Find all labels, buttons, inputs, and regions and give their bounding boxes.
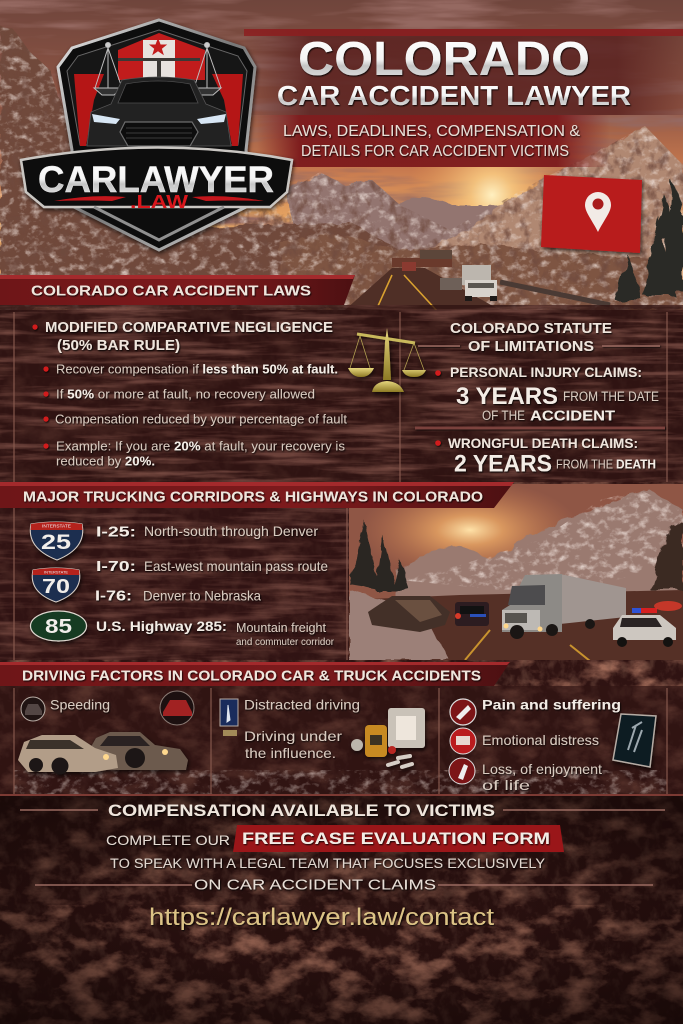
icon: pain [450,699,476,725]
section heading: laws [0,275,355,305]
icon: interstate 25 shield: 25 [41,531,71,554]
text block: statute of limitations: OF THE [482,408,525,423]
icon: route 85 oval [30,611,86,641]
illustration: breathalyzer and pills [351,708,425,767]
hero mountain scenery [0,0,683,312]
icon: interstate 70 shield: 70 [42,576,70,598]
footer: compensation call to action: TO SPEAK WITH A LEGAL TEAM THAT FOCUSES EXCLUSIVELY [110,856,545,871]
pines [350,520,410,590]
icon: loss of enjoyment [449,758,475,784]
icon: gold scales of justice [348,328,426,392]
section heading: driving factors [0,662,510,686]
cell: distracted and impaired driving [220,696,425,767]
illustration: two collided cars [18,732,188,774]
cell: speeding [18,691,194,774]
cell: distracted and impaired driving: Distracted driving [244,696,360,712]
text block: modified comparative negligence: Compensation reduced by your percentage of fault [55,412,347,426]
icon: distress [450,728,476,754]
police car [613,601,682,647]
text block: highway list: Mountain freight [236,620,326,635]
text block: statute of limitations: FROM THE [556,458,613,472]
text block: statute of limitations [415,321,665,478]
text block: statute of limitations: 3 YEARS [456,383,558,410]
red side panels [74,74,243,146]
heading: COMPENSATION AVAILABLE TO VICTIMS [108,802,495,820]
road ground [349,590,683,660]
hero truck [440,265,497,301]
flag [118,33,205,80]
text block: modified comparative negligence: Example: If you are 20% at fault, your recovery is [56,438,345,454]
text block: highway list: and commuter corridor [236,637,335,648]
panel: laws and statute background [0,305,683,482]
right mountain [433,126,683,259]
cell: distracted and impaired driving: Driving under [244,728,342,744]
cell: pain and suffering [449,698,656,793]
illustration: framed document in snow [613,714,656,767]
banner swooshes [54,196,264,201]
text block: modified comparative negligence: (50% BAR RULE) [57,338,180,354]
scales [94,42,221,95]
distant town and vehicles [392,250,452,271]
sun glow [418,167,560,206]
text block: modified comparative negligence [32,320,347,468]
subtitle: LAWS, DEADLINES, COMPENSATION & [283,123,580,140]
text block: statute of limitations: COLORADO STATUTE [450,321,612,337]
red callout box: FREE CASE EVALUATION FORM [242,829,550,848]
far mountain range [286,174,499,251]
icon: interstate 70 shield [32,568,80,602]
shield outer [58,20,255,250]
right pine trees [615,180,683,300]
text block: modified comparative negligence: reduced by 20%. [56,454,155,468]
mid foreground valley [280,234,683,310]
text block: statute of limitations: ACCIDENT [530,408,615,424]
logo: CarLawyer.law shield [21,20,292,250]
wreck [368,596,450,632]
text block: highway list: I-25: [96,524,136,540]
panel: highways background [0,508,350,660]
car [87,77,231,146]
cell: pain and suffering: Pain and suffering [482,698,621,712]
section heading: driving factors: DRIVING FACTORS IN COLORADO CAR & TRUCK ACCIDENTS [22,668,481,684]
cell: pain and suffering: Loss, of enjoyment [482,761,602,777]
icon: speeding gauge [21,697,45,721]
text block: highway list: North-south through Denver [144,523,318,539]
snow on slopes [0,0,683,310]
cell: pain and suffering: of life [482,777,530,793]
panel: driving factors background [0,686,683,796]
text block: statute of limitations: OF LIMITATIONS [468,339,594,355]
semi truck [502,574,626,639]
title [277,33,631,111]
footer: compensation call to action: COMPLETE OUR [106,832,230,848]
subtitle [283,123,580,160]
road [345,268,500,310]
section heading: laws: COLORADO CAR ACCIDENT LAWS [31,282,311,300]
text block: statute of limitations: PERSONAL INJURY CLAIMS: [450,364,642,380]
section heading: highways: MAJOR TRUCKING CORRIDORS & HIGHWAYS IN COLORADO [23,488,483,506]
lower chevron [94,207,224,240]
title band [244,29,683,167]
illustration: truck crash scene in mountains [349,484,683,660]
car with blue lights [455,602,489,626]
text block: highway list: U.S. Highway 285: [96,618,227,634]
text block: highway list: East-west mountain pass route [144,558,328,574]
red callout box [233,825,564,852]
left mountain wall [0,26,400,310]
cell: speeding: Speeding [50,696,110,712]
icon: route 85 oval: 85 [45,616,72,638]
banner [21,148,292,207]
text block: highway list [95,523,335,648]
text block: modified comparative negligence: Recover compensation if less than 50% at fault. [56,362,338,376]
text block: modified comparative negligence: If 50% or more at fault, no recovery allowed [56,386,315,402]
title: CAR ACCIDENT LAWYER [277,80,631,111]
footer: compensation call to action: ON CAR ACCIDENT CLAIMS [194,876,436,894]
text block: statute of limitations: DEATH [616,458,656,472]
cell: pain and suffering: Emotional distress [482,732,599,748]
text block: highway list: I-70: [96,558,136,575]
icon: interstate 25 shield: INTERSTATE [42,524,71,528]
icon: interstate 25 shield [30,522,83,560]
icon: phone [220,699,238,736]
icon: red car badge [160,691,194,725]
text block: statute of limitations: FROM THE DATE [563,389,659,404]
text block: highway list: I-76: [95,588,132,604]
peaks [395,490,683,600]
icon: interstate 70 shield: INTERSTATE [44,570,68,574]
cell: distracted and impaired driving: the influence. [245,745,336,761]
text block: modified comparative negligence: MODIFIED COMPARATIVE NEGLIGENCE [45,320,333,336]
contact url: https://carlawyer.law/contact [149,904,494,931]
wordmark: CARLAWYER [38,158,274,200]
logo: CarLawyer.law shield: .LAW [130,192,188,212]
text block: statute of limitations: 2 YEARS [454,450,552,478]
footer: compensation call to action [0,794,683,1024]
text block: statute of limitations: WRONGFUL DEATH CLAIMS: [448,435,638,451]
title: COLORADO [298,33,590,86]
section heading: highways [0,482,514,508]
text block: highway list: Denver to Nebraska [143,588,261,604]
subtitle: DETAILS FOR CAR ACCIDENT VICTIMS [301,143,569,160]
icon: Colorado map with location pin [541,175,642,253]
